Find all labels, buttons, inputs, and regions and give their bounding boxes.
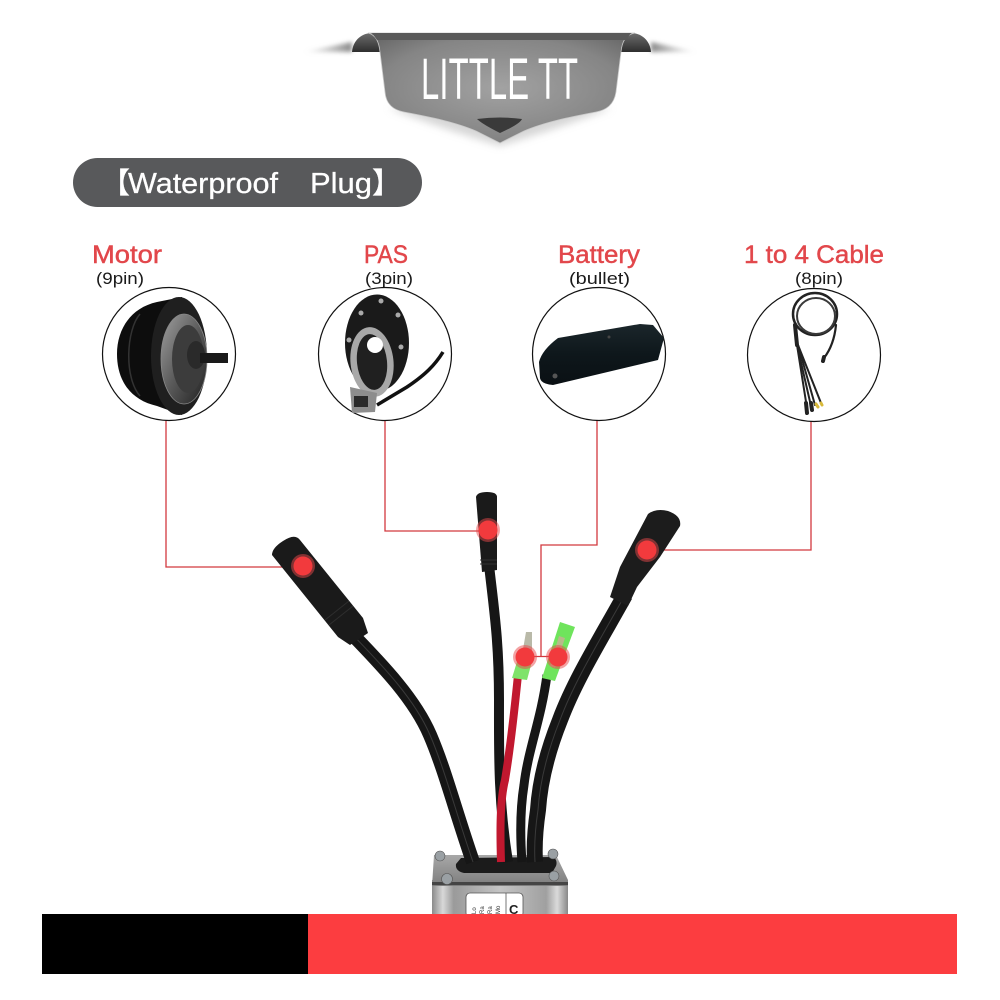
item: Motor xyxy=(92,241,236,420)
bottom bar xyxy=(42,914,957,974)
item: Battery: Battery xyxy=(558,241,641,269)
item: Motor: Motor xyxy=(92,241,162,269)
item: 1 to 4 Cable: 1 to 4 Cable xyxy=(744,241,884,269)
icon: PAS sensor disc xyxy=(345,294,443,413)
item: 1 to 4 Cable xyxy=(744,241,884,422)
heading pill: Waterproof Plug: 【 xyxy=(101,168,130,200)
controller box xyxy=(432,849,568,917)
plug: 1 to 4 cable xyxy=(610,510,680,606)
cables xyxy=(348,565,625,862)
gasket xyxy=(456,857,557,873)
item: PAS xyxy=(318,241,452,420)
item: 1 to 4 Cable: (8pin) xyxy=(795,269,843,288)
plug: motor xyxy=(272,537,368,645)
controller label xyxy=(466,893,523,917)
item: Battery: (bullet) xyxy=(569,269,630,288)
icon: coiled cable xyxy=(793,293,837,413)
banner title: LITTLE TT xyxy=(421,46,578,111)
cable: 1 to 4 xyxy=(535,595,625,862)
cable: battery positive red xyxy=(500,675,518,862)
cable: PAS xyxy=(489,565,508,862)
heading pill: Waterproof Plug: Waterproof xyxy=(128,168,279,200)
marker dots xyxy=(291,518,659,669)
heading pill: Waterproof Plug xyxy=(73,158,422,207)
screws xyxy=(435,849,559,884)
item: PAS: PAS xyxy=(364,241,408,269)
cable: battery negative xyxy=(521,675,547,862)
controller label: Mo xyxy=(496,905,502,914)
icon: hub motor xyxy=(117,297,228,415)
icon: battery pack xyxy=(539,324,664,385)
controller label: Ra xyxy=(480,906,486,914)
cable: motor xyxy=(348,630,473,862)
bullet connector: black wire xyxy=(542,622,575,681)
plug: PAS xyxy=(476,492,497,572)
leader lines xyxy=(166,420,811,656)
controller label: Ra xyxy=(488,906,494,914)
controller label: C xyxy=(509,902,519,917)
item: Battery xyxy=(532,241,666,420)
item: PAS: (3pin) xyxy=(365,269,413,288)
banner: LITTLE TT ribbon xyxy=(303,33,697,146)
controller label: Lo xyxy=(472,907,478,914)
heading pill: Waterproof Plug: Plug xyxy=(310,168,372,200)
item: Motor: (9pin) xyxy=(96,269,144,288)
heading pill: Waterproof Plug: 】 xyxy=(372,168,401,200)
bullet connector: red wire xyxy=(512,632,534,680)
